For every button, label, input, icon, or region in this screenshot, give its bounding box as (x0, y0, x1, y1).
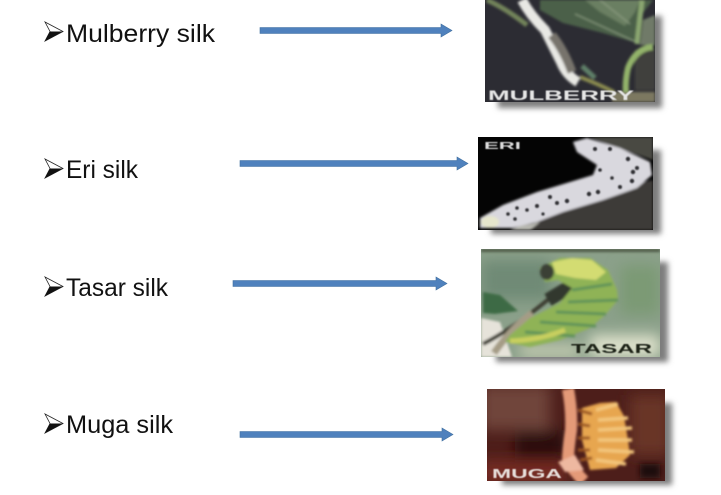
row: Eri silk (45, 137, 661, 234)
label: Muga silk: Muga silk (66, 411, 174, 439)
photo label: MUGA: MUGA (492, 467, 562, 481)
label: Mulberry silk: Mulberry silk (66, 20, 216, 48)
bullet icon: Muga (45, 414, 63, 433)
arrow: Muga (240, 428, 453, 441)
bullet icon: Eri (45, 159, 63, 178)
photo label: MULBERRY: MULBERRY (488, 88, 634, 103)
bullet icon: Tasar (45, 277, 63, 296)
photo: Eri caterpillar (478, 137, 661, 234)
label: Tasar silk: Tasar silk (66, 274, 168, 302)
bullet icon: Mulberry (45, 22, 63, 41)
row: Mulberry silk (45, 0, 662, 108)
arrow: Tasar (233, 277, 447, 290)
row: Muga silk (45, 385, 672, 485)
photo: Tasar caterpillar (481, 249, 668, 362)
photo label: ERI: ERI (484, 140, 521, 152)
photo: Mulberry caterpillar (485, 0, 662, 108)
arrow: Mulberry (260, 24, 452, 37)
label: Eri silk: Eri silk (66, 156, 138, 184)
photo label: TASAR: TASAR (571, 341, 653, 356)
photo: Muga caterpillar (480, 385, 672, 485)
arrow: Eri (240, 157, 468, 170)
row: Tasar silk (45, 249, 668, 362)
